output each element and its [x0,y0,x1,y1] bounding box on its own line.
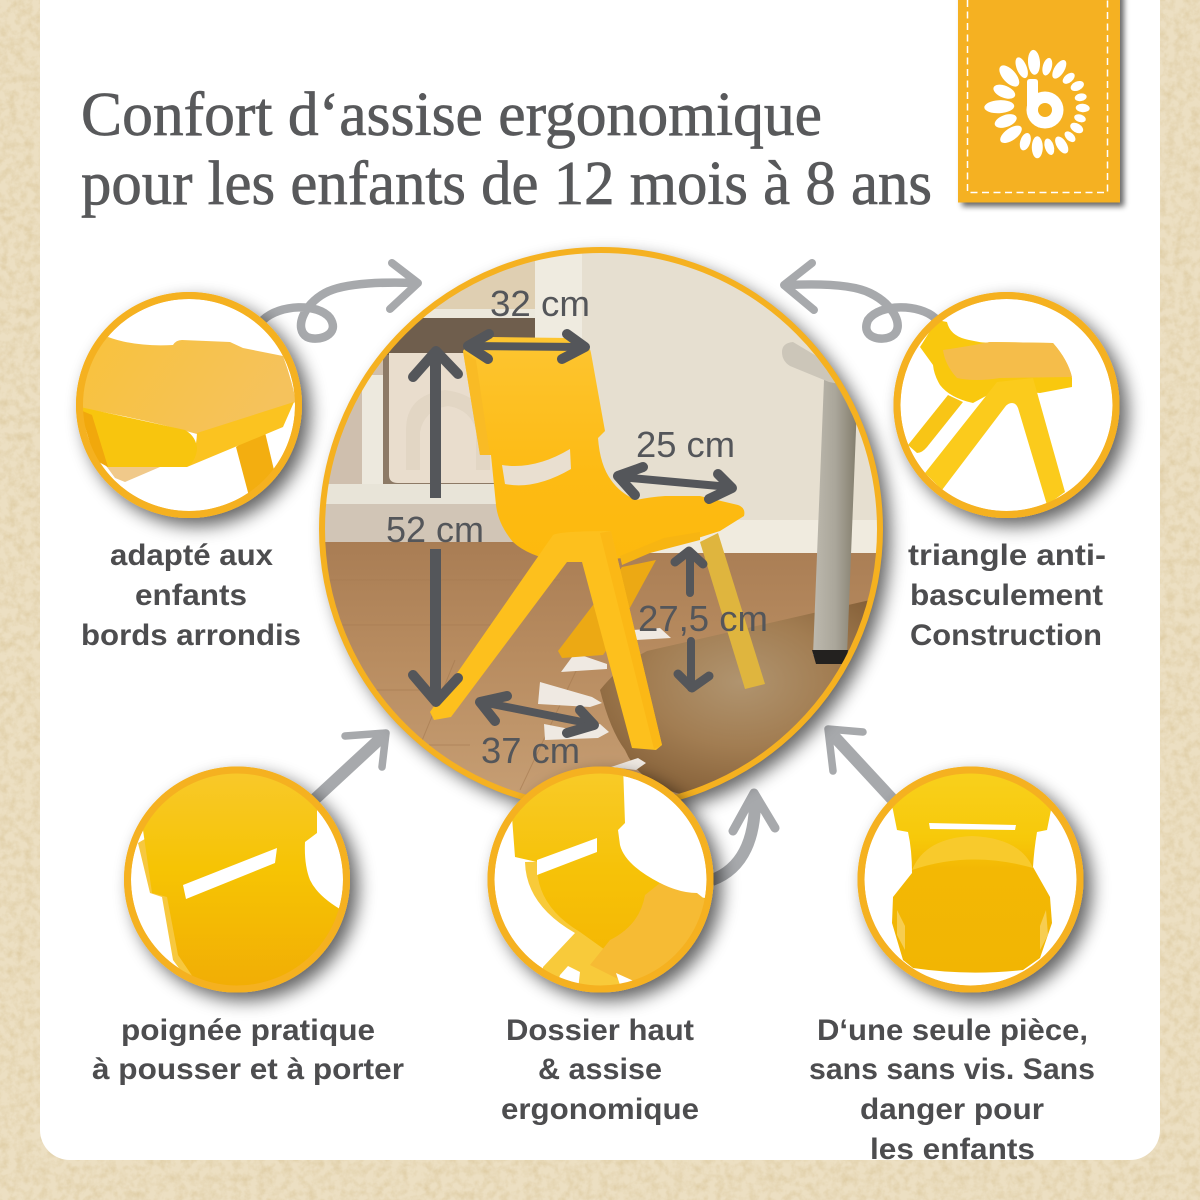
title: pour les enfants de 12 mois à 8 ans [81,150,932,218]
text: carrying handle [92,1014,404,1086]
arrow: backrest detail to main photo [712,793,775,880]
text: one-piece shell: sans sans vis. Sans [809,1053,1095,1086]
photo scene [325,253,877,795]
text: carrying handle: poignée pratique [121,1014,375,1047]
detail circle: rounded seat edge [76,292,302,518]
text: rounded edges: adapté aux [110,539,273,572]
arrow: seat detail to main photo [263,263,418,339]
text: anti-tip triangle: basculement [910,579,1103,612]
text: one-piece shell: danger pour [860,1093,1044,1126]
dimension labels: 27,5 cm [638,598,768,639]
tassels [538,628,671,770]
dimension: 27,5 cm seat height [675,551,709,688]
text: rounded edges: enfants [135,579,247,612]
table leg and top [782,342,858,664]
rug [600,600,880,795]
text: rounded edges: bords arrondis [81,619,301,652]
detail circle: anti-tip triangle [894,292,1120,518]
brand tag with logo [958,0,1120,202]
text: anti-tip triangle [908,539,1106,652]
dimension: 52 cm height [413,351,458,702]
main photo circle [310,240,900,830]
text: high backrest: & assise [538,1053,662,1086]
yellow chair [430,337,765,750]
title: Confort d‘assise ergonomique [81,81,822,149]
dimension labels: 25 cm [636,424,735,465]
dimension labels [386,283,768,771]
text: anti-tip triangle: Construction [910,619,1102,652]
text: anti-tip triangle: triangle anti- [908,539,1106,572]
detail circle: carrying handle [124,760,350,1000]
dimension labels: 52 cm [386,509,484,550]
text: carrying handle: à pousser et à porter [92,1053,404,1086]
dimension: 32 cm [468,334,585,359]
dimension labels: 37 cm [481,730,580,771]
text: high backrest [501,1014,699,1126]
text: one-piece shell: les enfants [870,1133,1035,1166]
arrow: handle detail to main photo [315,733,386,799]
skirting board [651,520,877,553]
text: one-piece shell [809,1014,1095,1166]
detail circle: high backrest [488,765,720,1000]
icon: sunflower logo [984,49,1090,158]
text: rounded edges [81,539,301,652]
dimension labels: 32 cm [490,283,590,324]
dimension: 25 cm depth [618,467,732,499]
title [81,81,932,218]
wooden floor [325,542,876,795]
text: high backrest: Dossier haut [506,1014,694,1047]
arrow: triangle detail to main photo [784,263,935,339]
detail circle: one-piece shell [858,765,1084,992]
arrow: one-piece detail to main photo [828,729,893,800]
shelf unit [320,250,582,542]
text: one-piece shell: D‘une seule pièce, [817,1014,1088,1047]
text: high backrest: ergonomique [501,1093,699,1126]
dimension: 37 cm width [480,696,594,733]
